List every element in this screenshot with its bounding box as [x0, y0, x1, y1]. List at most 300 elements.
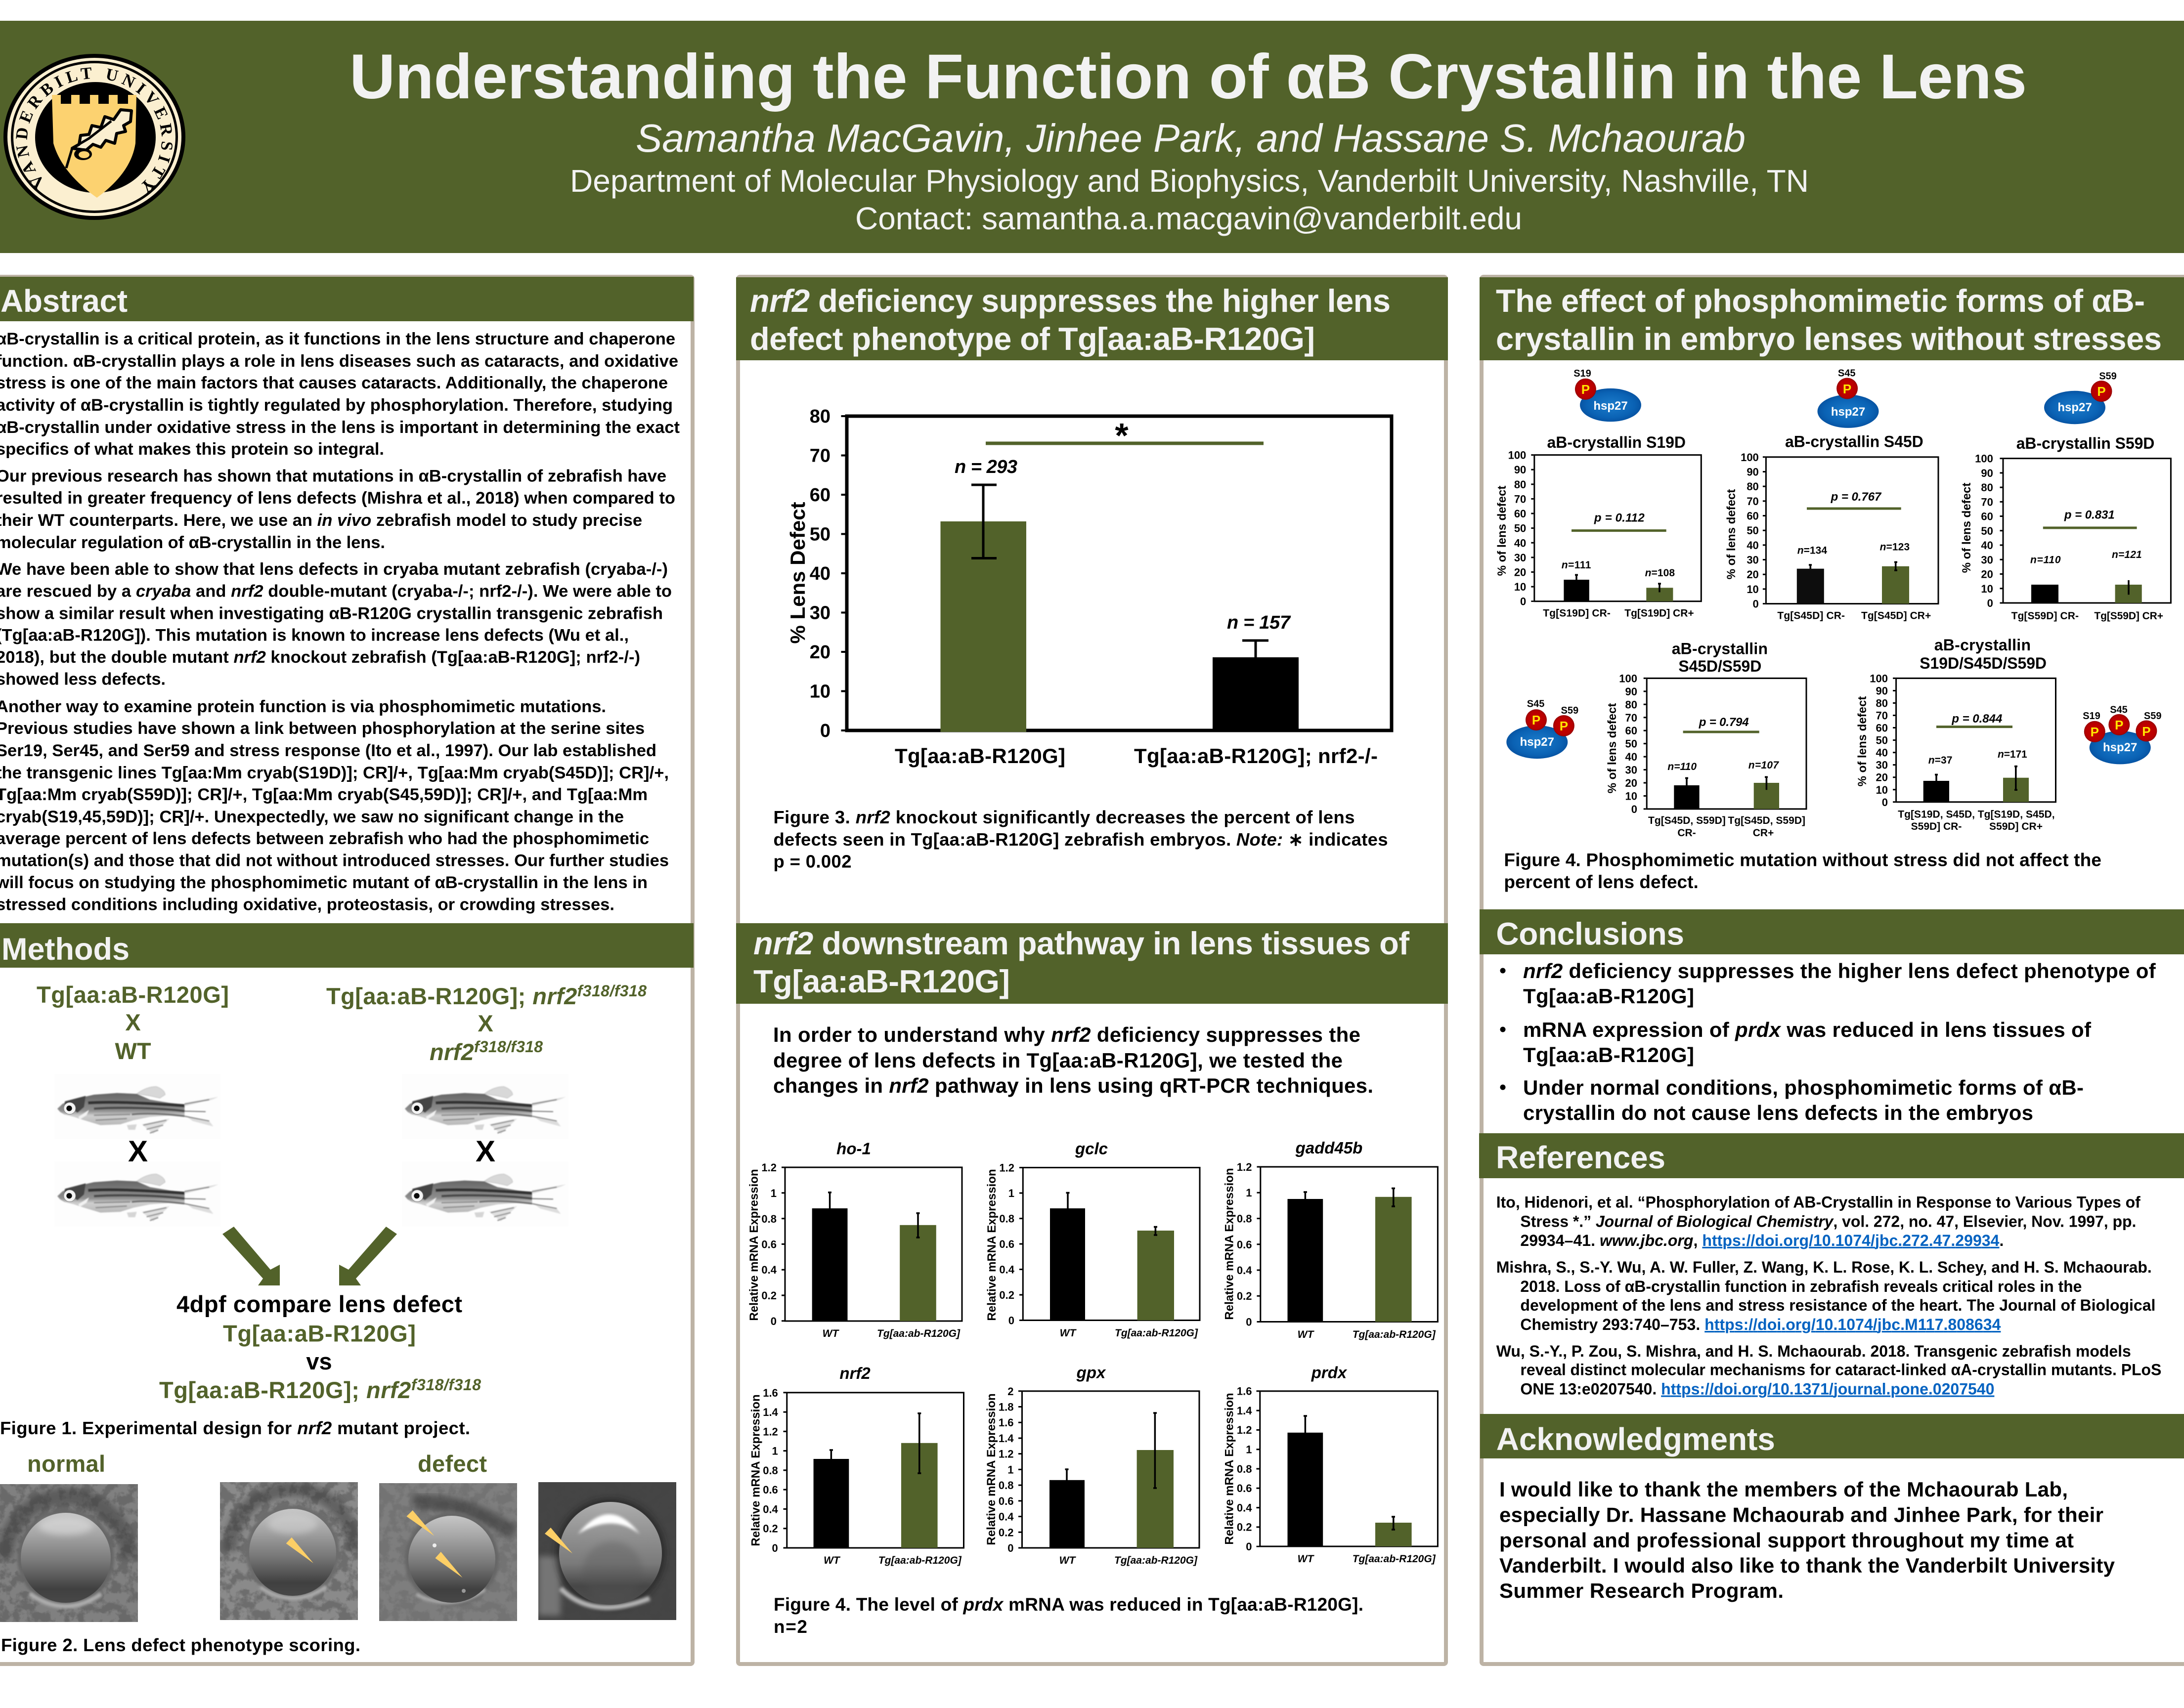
- text block: abstract: resulted in greater frequency of lens defects (Mishra et al., 2018) when compared to: [0, 489, 675, 508]
- bar chart: gpx: 1.4: [999, 1432, 1014, 1445]
- bar chart: S45D/S59D: n=107: [1748, 760, 1779, 771]
- bar chart: gadd45b: 0.8: [1237, 1213, 1252, 1225]
- text block: qRT-PCR intro: In order to understand why nrf2 deficiency suppresses the: [773, 1023, 1360, 1046]
- icon: hsp27 S45 S59: P: [1532, 713, 1540, 727]
- heading: phosphomimetic effect: The effect of phosphomimetic forms of αB-: [1496, 283, 2145, 319]
- icon: hsp27 S19 S45 S59: S19: [2083, 711, 2100, 722]
- bar chart: S19D/S45D/S59D: % of lens defect: [1856, 696, 1869, 786]
- bar chart: gadd45b: WT: [1298, 1329, 1314, 1340]
- bar chart: S59D: p = 0.831: [2064, 509, 2115, 522]
- bar chart: S59D: 0: [1987, 597, 1993, 609]
- icon: hsp27 S19 S45 S59: S45: [2110, 705, 2128, 716]
- bar chart: S19D: Tg[S19D] CR-: [1543, 608, 1611, 619]
- caption: figure 4 phosphomimetic: percent of lens defect.: [1504, 872, 1699, 892]
- bar chart: S59D: Tg[S59D] CR+: [2094, 610, 2163, 622]
- bar chart: prdx: Tg[aa:ab-R120G]: [1353, 1553, 1436, 1565]
- text block: abstract: their WT counterparts. Here, we use an in vivo zebrafish model to study precise: [0, 511, 642, 530]
- cross label: right: Tg[aa:aB-R120G]; nrf2: [326, 983, 577, 1009]
- bar chart: S45D: 50: [1747, 524, 1759, 537]
- cross label: left: X: [125, 1009, 141, 1035]
- bar chart: S45D/S59D: 40: [1625, 751, 1637, 763]
- cross label: right: f318/f318: [474, 1038, 543, 1056]
- heading: acknowledgments: Acknowledgments: [1496, 1421, 1775, 1457]
- icon: hsp27 S45: S45: [1838, 368, 1855, 379]
- bar chart: S59D: Tg[S59D] CR-: [2011, 610, 2079, 622]
- bar chart: S45D: n=134: [1797, 545, 1827, 556]
- heading: references: References: [1496, 1140, 1665, 1175]
- bar chart: gpx: [985, 1363, 1199, 1566]
- caption: figure 3: Figure 3. nrf2 knockout significantly decreases the percent of lens: [773, 807, 1354, 827]
- bar chart: gadd45b: Tg[aa:ab-R120G]: [1353, 1329, 1436, 1340]
- text block: abstract: Another way to examine protein function is via phosphomimetic mutations.: [0, 697, 606, 716]
- bar chart: S19D: 40: [1514, 537, 1526, 549]
- bar chart: ho-1: 1.2: [761, 1161, 777, 1174]
- text block: abstract: Ser19, Ser45, and Ser59 and stress response (Ito et al., 1997). Our lab established: [0, 741, 656, 760]
- text block: abstract: average percent of lens defects between zebrafish who had the phosphomimetic: [0, 829, 649, 848]
- bar chart: S19D: [1495, 433, 1701, 619]
- bar chart: gpx: 0: [1007, 1542, 1013, 1554]
- bar chart: S45D: 100: [1741, 451, 1759, 464]
- bar chart: prdx: 0.6: [1237, 1482, 1252, 1494]
- bar chart: S45D/S59D: S45D/S59D: [1678, 657, 1761, 675]
- text block: abstract: αB-crystallin is a critical protein, as it functions in the lens structure and chaperone: [0, 330, 675, 348]
- bar chart: S45D: 70: [1747, 495, 1759, 508]
- bar chart: gpx: 2: [1007, 1385, 1013, 1398]
- bar chart: gclc: 1.2: [999, 1161, 1014, 1174]
- bar chart: S45D/S59D: n=110: [1667, 761, 1697, 772]
- arrow: left to centre: [222, 1227, 280, 1285]
- title: Understanding the Function of αB Crystallin in the Lens: [349, 42, 2027, 112]
- bar chart: S19D/S45D/S59D: 30: [1876, 759, 1888, 771]
- bar chart: gadd45b: gadd45b: [1295, 1139, 1362, 1157]
- bar chart: S19D/S45D/S59D: aB-crystallin: [1934, 636, 2031, 654]
- bar chart: S19D/S45D/S59D: S59D] CR-: [1911, 821, 1962, 832]
- bar chart: prdx: 1.4: [1237, 1405, 1252, 1417]
- text block: abstract: (Tg[aa:aB-R120G]). This mutation is known to increase lens defects (Wu et al.,: [0, 626, 629, 644]
- bar chart: S45D: n=123: [1880, 542, 1910, 553]
- bar chart: S19D/S45D/S59D: [1856, 636, 2055, 832]
- bar chart: gpx: Tg[aa:ab-R120G]: [1114, 1555, 1198, 1566]
- caption: figure 4 phosphomimetic: [1504, 850, 2101, 892]
- bar chart: gclc: 0.2: [999, 1289, 1014, 1301]
- bar chart: S19D/S45D/S59D: 80: [1876, 697, 1888, 710]
- bar chart: nrf2: Relative mRNA Expression: [749, 1394, 762, 1546]
- bar chart: gpx: 1.6: [999, 1416, 1013, 1429]
- heading: methods: [0, 923, 694, 968]
- bar chart: S19D/S45D/S59D: Tg[S19D, S45D,: [1898, 809, 1975, 820]
- bar chart: S19D: 0: [1520, 596, 1526, 608]
- icon: zebrafish, left bottom: [54, 1161, 221, 1227]
- text block: abstract: function. αB-crystallin plays a role in lens diseases such as cataracts, and oxidative: [0, 352, 678, 371]
- bar chart: S19D/S45D/S59D: 0: [1882, 796, 1888, 809]
- text block: abstract: We have been able to show that lens defects in cryaba mutant zebrafish (cryaba-/-): [0, 560, 668, 579]
- bar chart: prdx: Relative mRNA Expression: [1223, 1393, 1236, 1545]
- bar chart: ho-1: 0: [771, 1315, 777, 1327]
- cross mark right: X: [476, 1135, 495, 1168]
- text block: acknowledgments: [1499, 1478, 2115, 1602]
- bar chart: figure 3 percent lens defect: *: [1115, 416, 1129, 455]
- bar chart: S59D: 40: [1981, 539, 1993, 552]
- bar chart: gadd45b: 0: [1246, 1316, 1252, 1328]
- bar chart: prdx: 0: [1246, 1540, 1252, 1553]
- text block: abstract: showed less defects.: [0, 670, 166, 689]
- bar chart: gclc: Relative mRNA Expression: [985, 1169, 999, 1321]
- bar chart: S19D: 50: [1514, 522, 1526, 535]
- arrow markers on lens images: [286, 1510, 572, 1578]
- bar chart: figure 3 percent lens defect: 20: [810, 642, 830, 663]
- icon: hsp27 S45: hsp27: [1831, 405, 1865, 419]
- bar chart: S45D: 40: [1747, 539, 1759, 552]
- bar chart: S45D/S59D: CR-: [1677, 827, 1696, 839]
- image: normal lens: [0, 1484, 138, 1622]
- bar chart: prdx: 1: [1246, 1443, 1252, 1456]
- bar chart: ho-1: 0.4: [761, 1264, 777, 1276]
- text block: abstract: are rescued by a cryaba and nrf2 double-mutant (cryaba-/-; nrf2-/-). We were able to: [0, 582, 672, 601]
- heading: phosphomimetic effect: [1480, 277, 2184, 360]
- bar chart: figure 3 percent lens defect: 10: [810, 681, 830, 702]
- text block: acknowledgments: personal and professional support throughout my time at: [1499, 1529, 2074, 1552]
- list: conclusions: crystallin do not cause lens defects in the embryos: [1523, 1101, 2033, 1124]
- bar chart: S19D: 70: [1514, 493, 1526, 505]
- heading: references: [1479, 1133, 2184, 1178]
- bar chart: gclc: Tg[aa:ab-R120G]: [1115, 1327, 1198, 1339]
- comparison text: f318/f318: [411, 1376, 481, 1394]
- text block: acknowledgments: especially Dr. Hassane Mchaourab and Jinhee Park, for their: [1499, 1503, 2103, 1526]
- bar chart: S19D/S45D/S59D: 20: [1876, 771, 1888, 784]
- bar chart: S19D: % of lens defect: [1495, 486, 1509, 576]
- bar chart: figure 3 percent lens defect: 80: [810, 406, 830, 427]
- bar chart: S19D: p = 0.112: [1594, 511, 1645, 524]
- bar chart: S19D: aB-crystallin S19D: [1547, 433, 1686, 451]
- text block: acknowledgments: Summer Research Program.: [1499, 1579, 1784, 1602]
- image: defect lens 3: [538, 1482, 676, 1620]
- bar chart: figure 3 percent lens defect: 0: [820, 721, 830, 741]
- bar chart: gpx: Relative mRNA Expression: [985, 1393, 998, 1545]
- bar chart: S45D: 0: [1753, 598, 1759, 610]
- bar chart: gclc: gclc: [1075, 1140, 1108, 1157]
- icon: hsp27 S45 S59: hsp27: [1520, 735, 1554, 749]
- bar chart: figure 3 percent lens defect: 70: [810, 446, 830, 467]
- bar chart: gpx: 0.8: [999, 1479, 1013, 1492]
- bar chart: S45D: % of lens defect: [1725, 489, 1738, 579]
- text block: references: Ito, Hidenori, et al. “Phosphorylation of AB-Crystallin in Response to Various Types of: [1496, 1193, 2140, 1211]
- bar chart: gadd45b: [1223, 1139, 1438, 1340]
- icon: hsp27 S45 S59: S59: [1561, 705, 1578, 716]
- bar chart: nrf2: 1.4: [763, 1406, 779, 1418]
- bar chart: S19D: n=111: [1562, 559, 1591, 571]
- bar chart: ho-1: 1: [771, 1187, 777, 1199]
- bar chart: figure 3 percent lens defect: 40: [810, 563, 830, 584]
- cross label: left: [37, 982, 229, 1064]
- bar chart: S19D: Tg[S19D] CR+: [1624, 608, 1694, 619]
- bar chart: ho-1: 0.8: [761, 1213, 777, 1225]
- bar chart: S19D/S45D/S59D: 40: [1876, 747, 1888, 759]
- bar chart: figure 3 percent lens defect: % Lens Defect: [786, 502, 809, 644]
- bar chart: nrf2: 0: [772, 1542, 778, 1554]
- bar chart: S45D: 80: [1747, 480, 1759, 493]
- bar chart: S45D: p = 0.767: [1831, 490, 1882, 504]
- diagram: experimental design: [37, 982, 647, 1403]
- bar chart: gpx: 1.8: [999, 1401, 1013, 1413]
- bar chart: S45D/S59D: Tg[S45D, S59D]: [1728, 815, 1805, 826]
- bar chart: gpx: gpx: [1076, 1363, 1106, 1382]
- bar chart: S45D/S59D: % of lens defect: [1606, 703, 1619, 793]
- bar chart: S19D/S45D/S59D: 50: [1876, 734, 1888, 747]
- caption: figure 1: Figure 1. Experimental design for nrf2 mutant project.: [0, 1418, 470, 1438]
- text block: references: development of the lens and stress resistance of the heart. The Journal of Biological: [1520, 1296, 2155, 1314]
- heading: conclusions: [1480, 909, 2184, 954]
- bar chart: S45D: Tg[S45D] CR-: [1777, 610, 1845, 621]
- bar chart: ho-1: WT: [823, 1328, 839, 1339]
- bar chart: S59D: % of lens defect: [1960, 483, 1973, 573]
- icon: zebrafish, right bottom: [402, 1161, 568, 1227]
- bar chart: gclc: WT: [1060, 1327, 1077, 1339]
- cross label: left: Tg[aa:aB-R120G]: [37, 982, 229, 1008]
- bar chart: S45D/S59D: 30: [1625, 764, 1637, 776]
- bar chart: S45D/S59D: p = 0.794: [1699, 716, 1749, 729]
- bar chart: S59D: [1960, 434, 2171, 622]
- bar chart: nrf2: nrf2: [839, 1364, 871, 1382]
- caption: figure 2: Figure 2. Lens defect phenotype scoring.: [1, 1635, 360, 1655]
- icon: hsp27 S59: P: [2097, 384, 2106, 399]
- bar chart: S45D: 20: [1747, 568, 1759, 581]
- icon: hsp27 S19 S45 S59: P: [2142, 724, 2151, 739]
- bar chart: S19D: 30: [1514, 552, 1526, 564]
- text block: abstract: will focus on studying the phosphomimetic mutant of αB-crystallin in the lens in: [0, 873, 648, 892]
- bar chart: gadd45b: 0.6: [1237, 1238, 1252, 1251]
- cross label: right: nrf2: [430, 1039, 474, 1065]
- text block: abstract: activity of αB-crystallin is tightly regulated by phosphorylation. Therefore, studying: [0, 396, 673, 415]
- bar chart: S59D: aB-crystallin S59D: [2016, 434, 2154, 452]
- comparison text: Tg[aa:aB-R120G]: [223, 1321, 416, 1346]
- text block: abstract: molecular regulation of αB-crystallin in the lens.: [0, 533, 385, 552]
- text block: qRT-PCR intro: [773, 1023, 1373, 1097]
- bar chart: S19D/S45D/S59D: Tg[S19D, S45D,: [1978, 809, 2055, 820]
- bar chart: S19D/S45D/S59D: 10: [1876, 784, 1888, 796]
- icon: hsp27 S45 S59: [1506, 699, 1578, 759]
- bar chart: ho-1: Relative mRNA Expression: [747, 1169, 761, 1321]
- bar chart: S19D/S45D/S59D: 90: [1876, 684, 1888, 697]
- bar chart: S45D: Tg[S45D] CR+: [1861, 610, 1931, 621]
- bar chart: ho-1: 0.6: [761, 1238, 777, 1250]
- icon: hsp27 S45 S59: P: [1560, 719, 1568, 733]
- bar chart: prdx: 0.8: [1237, 1463, 1252, 1475]
- bar chart: S59D: 90: [1981, 467, 1993, 479]
- bar chart: ho-1: Tg[aa:ab-R120G]: [877, 1328, 961, 1339]
- bar chart: S45D/S59D: [1606, 640, 1806, 839]
- label: normal: normal: [27, 1451, 105, 1477]
- bar chart: S19D/S45D/S59D: 60: [1876, 722, 1888, 734]
- text block: abstract: [0, 330, 680, 914]
- panel: phosphomimetic and conclusions column: [1479, 277, 2184, 1664]
- bar chart: S45D: 10: [1747, 583, 1759, 596]
- contact: Contact: samantha.a.macgavin@vanderbilt.edu: [855, 201, 1522, 236]
- bar chart: gclc: [985, 1140, 1200, 1339]
- bar chart: S19D: 80: [1514, 478, 1526, 491]
- icon: hsp27 S59: S59: [2099, 371, 2117, 382]
- text block: references: 29934–41. www.jbc.org, https://doi.org/10.1074/jbc.272.47.29934.: [1520, 1232, 2004, 1249]
- text block: references: Chemistry 293:740–753. https://doi.org/10.1074/jbc.M117.808634: [1520, 1316, 2001, 1333]
- arrow: right to centre: [339, 1227, 397, 1285]
- bar chart: figure 3 percent lens defect: 50: [810, 524, 830, 545]
- bar chart: S45D: 30: [1747, 554, 1759, 566]
- icon: Vanderbilt University seal: VANDERBILT UNIVERSITY: [16, 67, 173, 193]
- bar chart: prdx: WT: [1298, 1553, 1314, 1565]
- bar chart: S19D/S45D/S59D: n=37: [1928, 755, 1952, 766]
- list: conclusions: Under normal conditions, phosphomimetic forms of αB-: [1523, 1076, 2084, 1099]
- bar chart: S45D/S59D: 10: [1625, 790, 1637, 803]
- bar chart: gpx: 0.6: [999, 1495, 1013, 1507]
- icon: hsp27 S19 S45 S59: hsp27: [2103, 741, 2137, 754]
- bar chart: nrf2: 0.2: [763, 1523, 778, 1535]
- bar chart: prdx: prdx: [1311, 1363, 1348, 1382]
- icon: hsp27 S45 S59: S45: [1527, 699, 1544, 710]
- bar chart: S59D: 20: [1981, 568, 1993, 580]
- image: defect lens 2: [379, 1483, 517, 1621]
- caption: figure 4 phosphomimetic: Figure 4. Phosphomimetic mutation without stress did not affect the: [1504, 850, 2101, 870]
- bar chart: S45D/S59D: 60: [1625, 725, 1637, 737]
- bar chart: S45D/S59D: 70: [1625, 712, 1637, 724]
- bar chart: S45D: aB-crystallin S45D: [1785, 433, 1923, 451]
- bar chart: gclc: 1: [1008, 1187, 1014, 1199]
- bar chart: S19D/S45D/S59D: 100: [1870, 672, 1888, 684]
- text block: acknowledgments: I would like to thank the members of the Mchaourab Lab,: [1499, 1478, 2068, 1501]
- text block: abstract: show a similar result when investigating αB-R120G crystallin transgenic zebrafish: [0, 604, 663, 623]
- bar chart: gpx: 1: [1007, 1463, 1013, 1476]
- icon: hsp27 S19 S45 S59: S59: [2144, 711, 2161, 722]
- icon: hsp27 S45: P: [1843, 382, 1851, 396]
- bar chart: nrf2: 0.8: [763, 1464, 778, 1477]
- bar chart: gpx: 0.4: [999, 1511, 1014, 1523]
- text block: acknowledgments: Vanderbilt. I would also like to thank the Vanderbilt University: [1499, 1554, 2115, 1577]
- bar chart: S45D/S59D: aB-crystallin: [1672, 640, 1768, 657]
- bar chart: S19D/S45D/S59D: 70: [1876, 710, 1888, 722]
- bar chart: nrf2: Tg[aa:ab-R120G]: [878, 1555, 962, 1566]
- bar chart: ho-1: ho-1: [836, 1140, 871, 1157]
- bar chart: S45D/S59D: Tg[S45D, S59D]: [1648, 815, 1726, 826]
- bar chart: S59D: 100: [1975, 453, 1993, 465]
- bar chart: gclc: 0.6: [999, 1238, 1014, 1250]
- bar chart: figure 3 percent lens defect: 30: [810, 603, 830, 624]
- icon: hsp27 S19: S19: [1573, 368, 1591, 379]
- bar chart: S19D/S45D/S59D: S59D] CR+: [1989, 821, 2043, 832]
- bar chart: figure 3 percent lens defect: n = 157: [1227, 612, 1291, 633]
- text block: abstract: cryab(S19,45,59D)]; CR]/+. Unexpectedly, we saw no significant change in the: [0, 808, 624, 826]
- text block: references: Mishra, S., S.-Y. Wu, A. W. Fuller, Z. Wang, K. L. Rose, K. L. Schey, and H. S. Mchaourab.: [1496, 1258, 2152, 1276]
- bar chart: S45D/S59D: 50: [1625, 738, 1637, 750]
- list: conclusions: Tg[aa:aB-R120G]: [1523, 1043, 1694, 1067]
- bar chart: S45D: [1725, 433, 1938, 621]
- text block: references: Stress *.” Journal of Biological Chemistry, vol. 272, no. 47, Elsevier, Nov. 1997, pp.: [1520, 1213, 2136, 1231]
- heading: abstract: Abstract: [0, 283, 128, 319]
- bar chart: S45D/S59D: 90: [1625, 685, 1637, 698]
- heading: abstract: [0, 277, 694, 321]
- icon: zebrafish, right top: [402, 1074, 568, 1139]
- bar chart: S19D: 100: [1508, 449, 1526, 462]
- caption: figure 3: defects seen in Tg[aa:aB-R120G] zebrafish embryos. Note: ∗ indicates: [773, 829, 1388, 850]
- bar chart: S45D/S59D: 100: [1619, 672, 1637, 684]
- bar chart: gadd45b: Relative mRNA Expression: [1223, 1168, 1236, 1320]
- bar chart: S19D: 90: [1514, 464, 1526, 476]
- heading: nrf2 downstream pathway: nrf2 downstream pathway in lens tissues of: [753, 925, 1409, 961]
- panel: abstract and methods column: [0, 277, 694, 1664]
- bar chart: S45D/S59D: 80: [1625, 698, 1637, 711]
- text block: references: 2018. Loss of αB-crystallin function in zebrafish reveals critical roles in the: [1520, 1278, 2082, 1295]
- text block: abstract: mutation(s) and those that did not without introduced stresses. Our further studies: [0, 851, 669, 870]
- cross mark left: X: [128, 1135, 148, 1168]
- bar chart: S59D: 60: [1981, 511, 1993, 523]
- bar chart: gclc: 0: [1008, 1315, 1014, 1326]
- heading: phosphomimetic effect: crystallin in embryo lenses without stresses: [1496, 321, 2162, 357]
- bar chart: gadd45b: 1.2: [1237, 1161, 1252, 1173]
- bar chart: prdx: 0.2: [1237, 1521, 1252, 1534]
- heading: methods: Methods: [1, 932, 130, 967]
- bar chart: gpx: 0.2: [999, 1526, 1013, 1538]
- text block: references: reveal distinct molecular mechanisms for cataract-linked αA-crystallin mutants. PLoS: [1520, 1361, 2161, 1379]
- text block: references: [1496, 1193, 2161, 1398]
- icon: hsp27 S19: P: [1581, 382, 1590, 397]
- image: defect lens 1: [220, 1482, 358, 1620]
- cross label: right: [326, 982, 647, 1065]
- header banner: [0, 21, 2184, 253]
- cross label: left: WT: [115, 1038, 151, 1064]
- text block: abstract: αB-crystallin under oxidative stress in the lens is important in determining the exact: [0, 418, 680, 437]
- bar chart: S59D: 10: [1981, 583, 1993, 595]
- text block: abstract: Tg[aa:Mm cryab(S59D)]; CR]/+, Tg[aa:Mm cryab(S45,59D)]; CR]/+, and Tg[aa:Mm: [0, 785, 648, 804]
- text block: abstract: Previous studies have shown a link between phosphorylation at the serine sites: [0, 719, 645, 738]
- cross label: right: f318/f318: [577, 982, 647, 1000]
- bar chart: prdx: 1.2: [1237, 1424, 1252, 1436]
- text block: qRT-PCR intro: degree of lens defects in Tg[aa:aB-R120G], we tested the: [773, 1049, 1343, 1072]
- bar chart: figure 3 percent lens defect: [786, 406, 1392, 768]
- heading: nrf2 downstream pathway: Tg[aa:aB-R120G]: [753, 963, 1010, 999]
- heading: acknowledgments: [1480, 1414, 2184, 1458]
- icon: hsp27 S19 S45 S59: P: [2115, 718, 2123, 732]
- bar chart: gpx: 1.2: [999, 1448, 1013, 1460]
- caption: figure 4 prdx: [774, 1594, 1363, 1637]
- list: conclusions: [1500, 959, 2156, 1124]
- bar chart: S19D: 10: [1514, 581, 1526, 593]
- bar chart: S59D: n=110: [2030, 555, 2061, 565]
- bar chart: S59D: 70: [1981, 496, 1993, 508]
- bar chart: nrf2: WT: [824, 1555, 841, 1566]
- list: conclusions: mRNA expression of prdx was reduced in lens tissues of: [1523, 1018, 2092, 1041]
- icon: hsp27 S19: hsp27: [1593, 399, 1628, 413]
- bar chart: nrf2: 0.4: [763, 1503, 779, 1515]
- bar chart: ho-1: 0.2: [761, 1289, 777, 1302]
- text block: abstract: specifics of what makes this protein so integral.: [0, 440, 384, 459]
- bar chart: S45D/S59D: CR+: [1753, 827, 1774, 839]
- heading: nrf2 deficiency: nrf2 deficiency suppresses the higher lens: [750, 283, 1391, 319]
- cross label: right: X: [478, 1010, 493, 1036]
- icon: hsp27 S59: [2044, 371, 2117, 424]
- bar chart: prdx: 0.4: [1237, 1501, 1252, 1514]
- text block: abstract: the transgenic lines Tg[aa:Mm cryab(S19D)]; CR]/+, Tg[aa:Mm cryab(S45D)]; CR]/+,: [0, 764, 669, 782]
- bar chart: figure 3 percent lens defect: Tg[aa:aB-R120G]: [895, 744, 1065, 768]
- caption: figure 4 prdx: n=2: [774, 1617, 807, 1637]
- bar chart: prdx: 1.6: [1237, 1385, 1252, 1398]
- bar chart: ho-1: [747, 1140, 962, 1339]
- caption: figure 3: [773, 807, 1388, 872]
- comparison text: Tg[aa:aB-R120G]; nrf2: [159, 1377, 411, 1403]
- bar chart: nrf2: 0.6: [763, 1484, 778, 1496]
- comparison text: vs: [306, 1348, 332, 1374]
- bar chart: figure 3 percent lens defect: 60: [810, 485, 830, 506]
- bar chart: gclc: 0.8: [999, 1213, 1014, 1225]
- bar chart: gadd45b: 0.2: [1237, 1290, 1252, 1302]
- icon: hsp27 S45: [1817, 368, 1878, 428]
- bar chart: S59D: n=121: [2112, 549, 2142, 560]
